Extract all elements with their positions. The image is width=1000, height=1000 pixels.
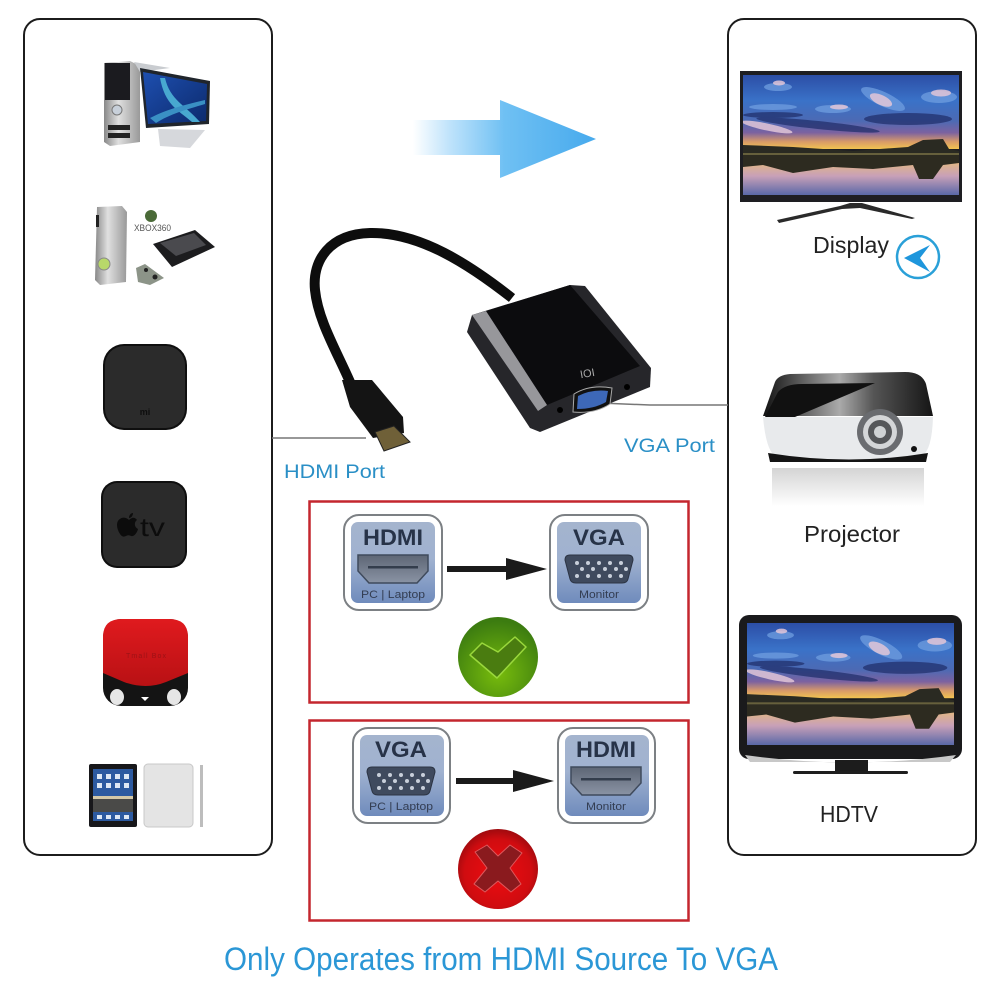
panel: source devices bbox=[24, 19, 272, 855]
icon: projector bbox=[763, 372, 933, 506]
icon: desktop computer bbox=[104, 61, 210, 148]
HDMI connector tip bbox=[375, 426, 410, 451]
VGA socket bbox=[573, 387, 612, 412]
cable bbox=[315, 233, 512, 382]
card: VGA source: PC | Laptop bbox=[369, 801, 433, 813]
icon: red media box: Tmall Box bbox=[126, 653, 166, 660]
card: HDMI monitor: Monitor bbox=[586, 801, 626, 813]
label: VGA Port: VGA Port bbox=[624, 436, 716, 457]
icon: black media box: mi bbox=[140, 407, 150, 417]
label: HDTV: HDTV bbox=[820, 801, 879, 827]
arrow: VGA to HDMI bbox=[456, 770, 554, 792]
card: HDMI monitor bbox=[558, 728, 655, 823]
screw holes bbox=[557, 384, 630, 413]
panel: wrong direction bbox=[310, 720, 688, 920]
icon: Apple TV box: tv bbox=[140, 512, 165, 542]
icon: black media box bbox=[103, 344, 187, 430]
arrow: direction of signal bbox=[413, 100, 596, 178]
icon: game consoles: XBOX360 bbox=[134, 223, 171, 234]
card: HDMI source: PC | Laptop bbox=[361, 589, 425, 601]
card: VGA monitor: VGA bbox=[573, 525, 625, 550]
callout line: VGA port bbox=[600, 403, 728, 405]
icon: green check bbox=[458, 617, 538, 697]
VGA symbol: IOI bbox=[579, 367, 596, 381]
card: VGA monitor: Monitor bbox=[579, 589, 619, 601]
panel: correct direction bbox=[310, 502, 688, 702]
icon: display monitor bbox=[740, 71, 962, 223]
icon: tablet front, back and side bbox=[89, 764, 203, 827]
label: HDMI Port: HDMI Port bbox=[284, 462, 386, 483]
adapter silver band bbox=[472, 311, 547, 411]
icon: red media box bbox=[103, 619, 188, 706]
caption: Only Operates from HDMI Source To VGA bbox=[224, 941, 779, 977]
card: VGA source: VGA bbox=[375, 737, 427, 762]
icon: Apple TV box bbox=[101, 481, 187, 568]
label: Projector: Projector bbox=[804, 521, 900, 547]
card: HDMI source bbox=[344, 515, 442, 610]
adapter top face bbox=[486, 285, 640, 405]
panel: output devices bbox=[728, 19, 976, 855]
card: HDMI source: HDMI bbox=[363, 525, 423, 550]
label: Display: Display bbox=[813, 232, 889, 258]
HDMI plug bbox=[342, 380, 404, 438]
icon: HDTV bbox=[739, 615, 962, 774]
card: VGA monitor bbox=[550, 515, 648, 610]
icon: game consoles bbox=[95, 206, 215, 285]
icon: blue left arrow badge bbox=[897, 236, 939, 278]
icon: red cross bbox=[458, 829, 538, 909]
callout line: HDMI port bbox=[272, 437, 366, 439]
adapter product bbox=[315, 233, 651, 451]
card: HDMI monitor: HDMI bbox=[576, 737, 636, 762]
adapter body bbox=[467, 285, 651, 432]
card: VGA source bbox=[353, 728, 450, 823]
arrow: HDMI to VGA bbox=[447, 558, 547, 580]
